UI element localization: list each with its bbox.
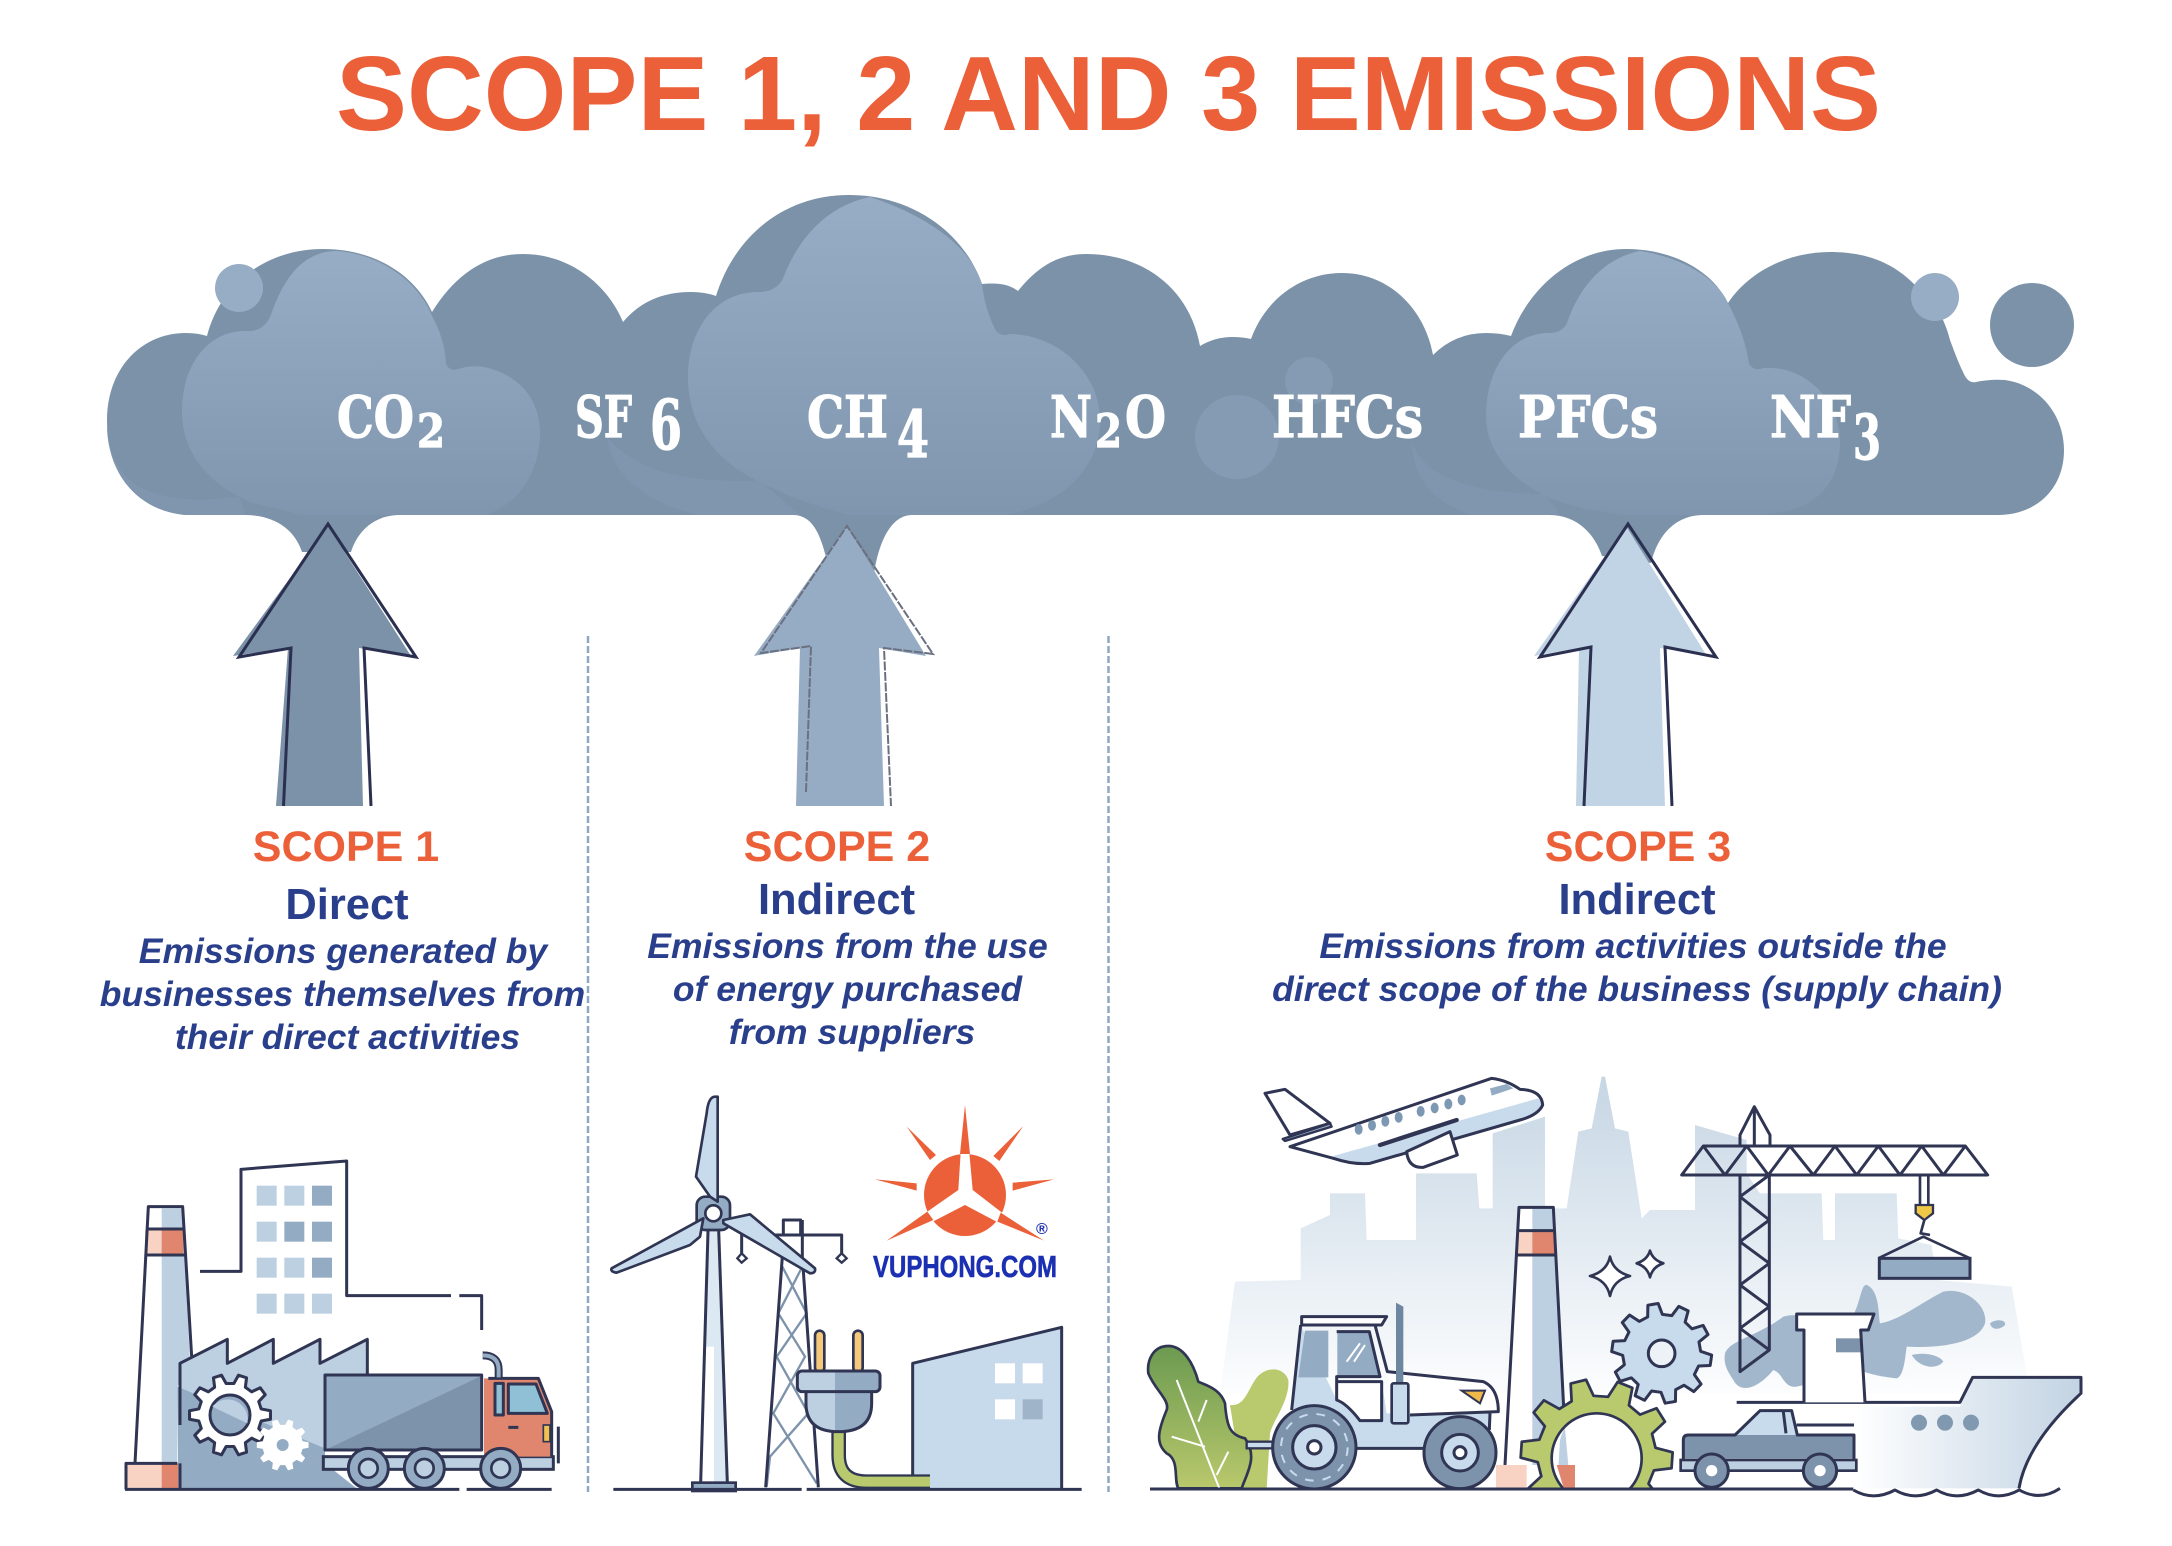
icon: factory hall	[177, 1339, 367, 1488]
icon: pickup truck	[1681, 1411, 1856, 1487]
description: scope 2	[647, 926, 1048, 1052]
icon: sparkle stars	[1590, 1251, 1663, 1296]
label: N2O	[1050, 384, 1166, 458]
cloud: CO2 light puff	[182, 251, 540, 515]
icon: office building	[200, 1161, 482, 1330]
cloud: lower left light crescent	[107, 425, 245, 515]
label: SF6: SF	[575, 384, 632, 451]
cloud: CH4 light puff	[688, 197, 1100, 515]
label: CO2: 2	[417, 404, 445, 458]
label: NF3: NF	[1770, 384, 1851, 451]
cloud of greenhouse gases	[107, 195, 2074, 574]
label: CH4: 4	[897, 397, 929, 473]
description: scope 2: of energy purchased	[673, 969, 1023, 1009]
description: scope 1	[100, 931, 585, 1057]
description: scope 2: from suppliers	[729, 1012, 975, 1052]
subheading: direct: Direct	[285, 881, 409, 929]
label: N2O: 2	[1095, 404, 1122, 458]
heading: scope 3: SCOPE 3	[1545, 823, 1731, 871]
subheading: indirect: Indirect	[1558, 876, 1716, 924]
icon: ship	[1737, 1314, 2081, 1496]
icon: pylon	[737, 1220, 847, 1487]
icon: smoke cloud	[1725, 1285, 1985, 1388]
registered mark: ®	[1036, 1221, 1048, 1238]
icon: truck	[323, 1355, 558, 1488]
label: N2O: N	[1050, 384, 1092, 451]
description: scope 3: direct scope of the business (supply chain)	[1272, 969, 2002, 1009]
icon: plants	[1148, 1346, 1288, 1488]
label: CH4: CH	[807, 384, 888, 451]
logo: VUPHONG.COM sun	[873, 1105, 1057, 1284]
icon: wind turbine	[611, 1097, 815, 1491]
city skyline backdrop	[1220, 1077, 2030, 1393]
text block: scope 1	[100, 823, 585, 1057]
icon: gears	[190, 1375, 309, 1470]
dashed divider: scope 2 and 3	[1107, 636, 1110, 1492]
label: NF3	[1770, 384, 1881, 474]
text block: scope 2	[647, 823, 1048, 1052]
dashed divider: scope 1 and 2	[587, 636, 589, 1492]
arrow: scope 3	[1534, 524, 1716, 806]
icon: plug and cable	[797, 1331, 930, 1482]
icon: airplane	[1265, 1078, 1543, 1167]
subheading: indirect: Indirect	[758, 876, 915, 924]
icon: building	[913, 1327, 1062, 1488]
cloud: dark silhouette	[107, 195, 2064, 574]
label: PFCs: PFCs	[1518, 384, 1658, 451]
label: SF6: 6	[650, 386, 682, 466]
description: scope 3	[1272, 926, 2002, 1009]
gas labels	[337, 384, 1881, 474]
heading: scope 1: SCOPE 1	[253, 823, 439, 871]
label: N2O: O	[1125, 384, 1166, 451]
description: scope 1: their direct activities	[175, 1017, 520, 1057]
logo wordmark: VUPHONG.COM	[873, 1249, 1057, 1284]
text block: scope 3	[1272, 823, 2002, 1009]
arrow: scope 1	[233, 524, 416, 806]
illustration: wind turbine, pylon, plug and building	[611, 1097, 1082, 1491]
heading: scope 2: SCOPE 2	[744, 823, 930, 871]
illustration: supply chain scene	[1148, 1077, 2081, 1534]
icon: crane	[1682, 1107, 1988, 1372]
illustration: factory and truck	[125, 1161, 558, 1489]
label: SF6	[575, 384, 682, 466]
icon: chimney	[1496, 1207, 1575, 1489]
description: scope 3: Emissions from activities outside the	[1319, 926, 1947, 966]
logo mark	[875, 1105, 1054, 1241]
icon: green gear	[1519, 1378, 1674, 1488]
cloud: middle crescent	[607, 437, 800, 515]
label: CH4	[807, 384, 929, 473]
cloud: right crescent	[1412, 442, 1560, 515]
icon: tractor	[1247, 1303, 1498, 1489]
title: SCOPE 1, 2 AND 3 EMISSIONS	[336, 35, 1881, 153]
description: scope 1: businesses themselves from	[100, 974, 585, 1014]
description: scope 1: Emissions generated by	[139, 931, 549, 971]
label: HFCs: HFCs	[1272, 384, 1423, 451]
label: CO2: CO	[337, 384, 414, 451]
icon: grey gear	[1606, 1298, 1718, 1409]
label: NF3: 3	[1853, 401, 1881, 474]
cloud: small puffs	[215, 264, 2074, 479]
description: scope 2: Emissions from the use	[647, 926, 1048, 966]
cloud: PFC light puff	[1486, 251, 1840, 515]
arrow: scope 2	[754, 526, 933, 806]
icon: chimney	[125, 1207, 192, 1489]
